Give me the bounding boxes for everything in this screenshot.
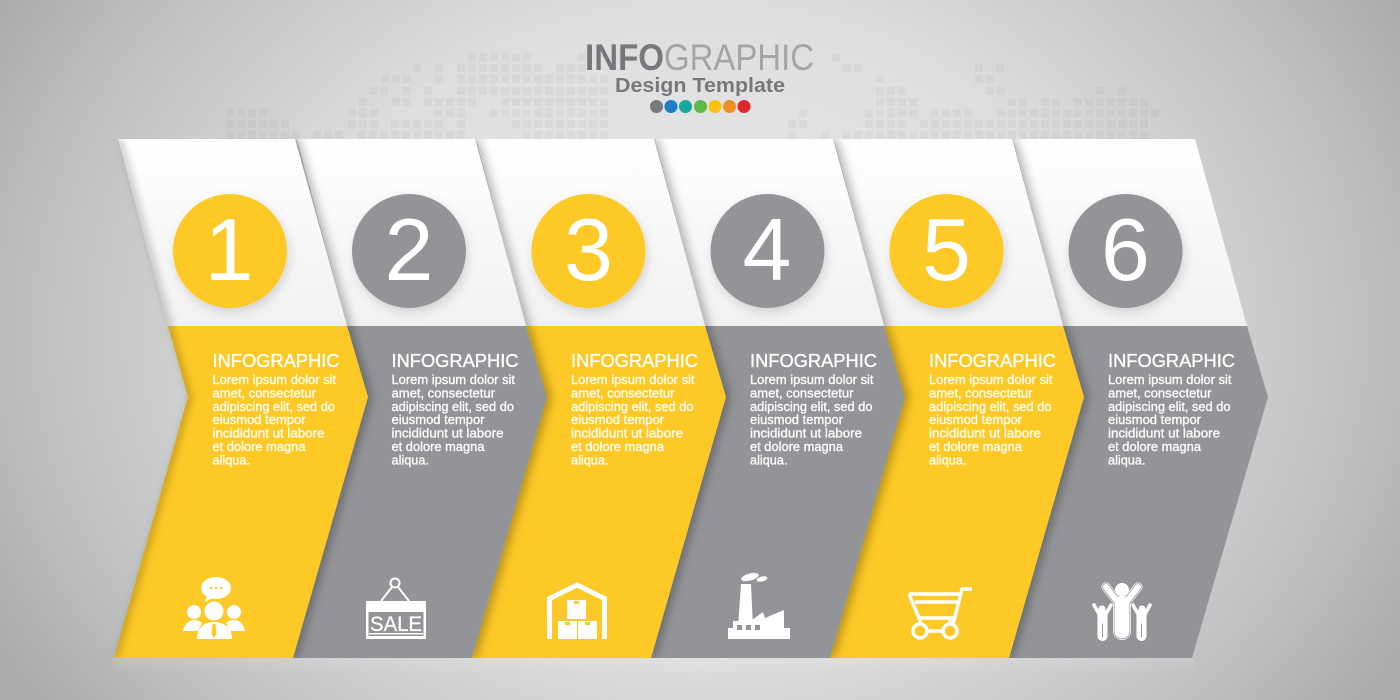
panel 6 xyxy=(1009,139,1268,658)
panel 1: 1 xyxy=(205,200,253,299)
panel 2: aliqua. xyxy=(392,452,429,467)
icon: cheering people xyxy=(1094,583,1150,637)
panel 2 xyxy=(293,139,547,658)
title: INFO xyxy=(585,37,664,78)
panel 5: Lorem ipsum dolor sit xyxy=(929,372,1053,387)
panel 2: adipiscing elit, sed do xyxy=(392,399,514,414)
panel 6: Lorem ipsum dolor sit xyxy=(1108,372,1232,387)
icon: sale sign: SALE xyxy=(370,613,422,636)
coloured dots xyxy=(650,100,750,113)
panels xyxy=(114,139,1268,658)
panel 5: adipiscing elit, sed do xyxy=(929,399,1052,414)
icon: warehouse xyxy=(550,585,604,639)
panel 3: eiusmod tempor xyxy=(571,412,665,427)
dotted world map xyxy=(226,57,1161,135)
panel 4: 4 xyxy=(743,200,791,299)
panel 2: eiusmod tempor xyxy=(392,412,485,427)
panel 2: amet, consectetur xyxy=(392,385,496,400)
panel 4: amet, consectetur xyxy=(750,385,854,400)
panel 6: eiusmod tempor xyxy=(1108,412,1202,427)
panel 3 xyxy=(472,139,726,658)
floor reflection xyxy=(114,658,1194,674)
title: GRAPHIC xyxy=(664,37,814,78)
icon: team with speech bubble xyxy=(183,577,245,639)
panel 4 xyxy=(651,139,905,658)
panel 4: adipiscing elit, sed do xyxy=(750,399,872,414)
panel 6: aliqua. xyxy=(1108,452,1146,467)
title xyxy=(585,37,814,97)
panel 3: incididunt ut labore xyxy=(571,426,683,441)
panel 5: aliqua. xyxy=(929,452,966,467)
panel 1: INFOGRAPHIC xyxy=(212,351,340,371)
panel 6: incididunt ut labore xyxy=(1108,426,1220,441)
panel 1: Lorem ipsum dolor sit xyxy=(212,372,336,387)
panel 1 xyxy=(114,139,368,658)
panel 6: amet, consectetur xyxy=(1108,385,1212,400)
panel 1: adipiscing elit, sed do xyxy=(212,399,335,414)
icon: sale sign xyxy=(366,578,426,639)
panel 2: Lorem ipsum dolor sit xyxy=(392,372,515,387)
panel 6: INFOGRAPHIC xyxy=(1108,351,1235,371)
panel 1: eiusmod tempor xyxy=(212,412,306,427)
panel 3: INFOGRAPHIC xyxy=(571,351,698,371)
icon: factory xyxy=(728,571,790,639)
panel 3: aliqua. xyxy=(571,452,608,467)
panel 5: incididunt ut labore xyxy=(929,426,1041,441)
panel 5: INFOGRAPHIC xyxy=(929,351,1056,371)
icon: shopping cart xyxy=(909,589,972,638)
panel 1: amet, consectetur xyxy=(212,385,317,400)
panel 5: amet, consectetur xyxy=(929,385,1033,400)
panel 2: 2 xyxy=(385,200,433,299)
panel 1: incididunt ut labore xyxy=(212,426,324,441)
panel 2: et dolore magna xyxy=(392,439,485,454)
panel 5 xyxy=(830,139,1084,658)
panel 2: INFOGRAPHIC xyxy=(392,351,518,371)
panel 3: amet, consectetur xyxy=(571,385,675,400)
panel 3: 3 xyxy=(564,200,613,299)
panel 3: et dolore magna xyxy=(571,439,665,454)
panel 3: adipiscing elit, sed do xyxy=(571,399,694,414)
panel 4: incididunt ut labore xyxy=(750,426,862,441)
panel 6: 6 xyxy=(1101,200,1150,299)
panel 2: incididunt ut labore xyxy=(392,426,504,441)
panel 6: adipiscing elit, sed do xyxy=(1108,399,1230,414)
panel 4: et dolore magna xyxy=(750,439,844,454)
panel 4: aliqua. xyxy=(750,452,788,467)
panel 4: eiusmod tempor xyxy=(750,412,844,427)
panel 5: eiusmod tempor xyxy=(929,412,1023,427)
title: Design Template xyxy=(615,75,785,97)
panel 6: et dolore magna xyxy=(1108,439,1202,454)
panel 3: Lorem ipsum dolor sit xyxy=(571,372,695,387)
panel 5: 5 xyxy=(922,200,971,299)
panel 1: aliqua. xyxy=(212,452,250,467)
panel 4: INFOGRAPHIC xyxy=(750,351,877,371)
panel 4: Lorem ipsum dolor sit xyxy=(750,372,874,387)
panel 1: et dolore magna xyxy=(212,439,306,454)
panel 5: et dolore magna xyxy=(929,439,1023,454)
